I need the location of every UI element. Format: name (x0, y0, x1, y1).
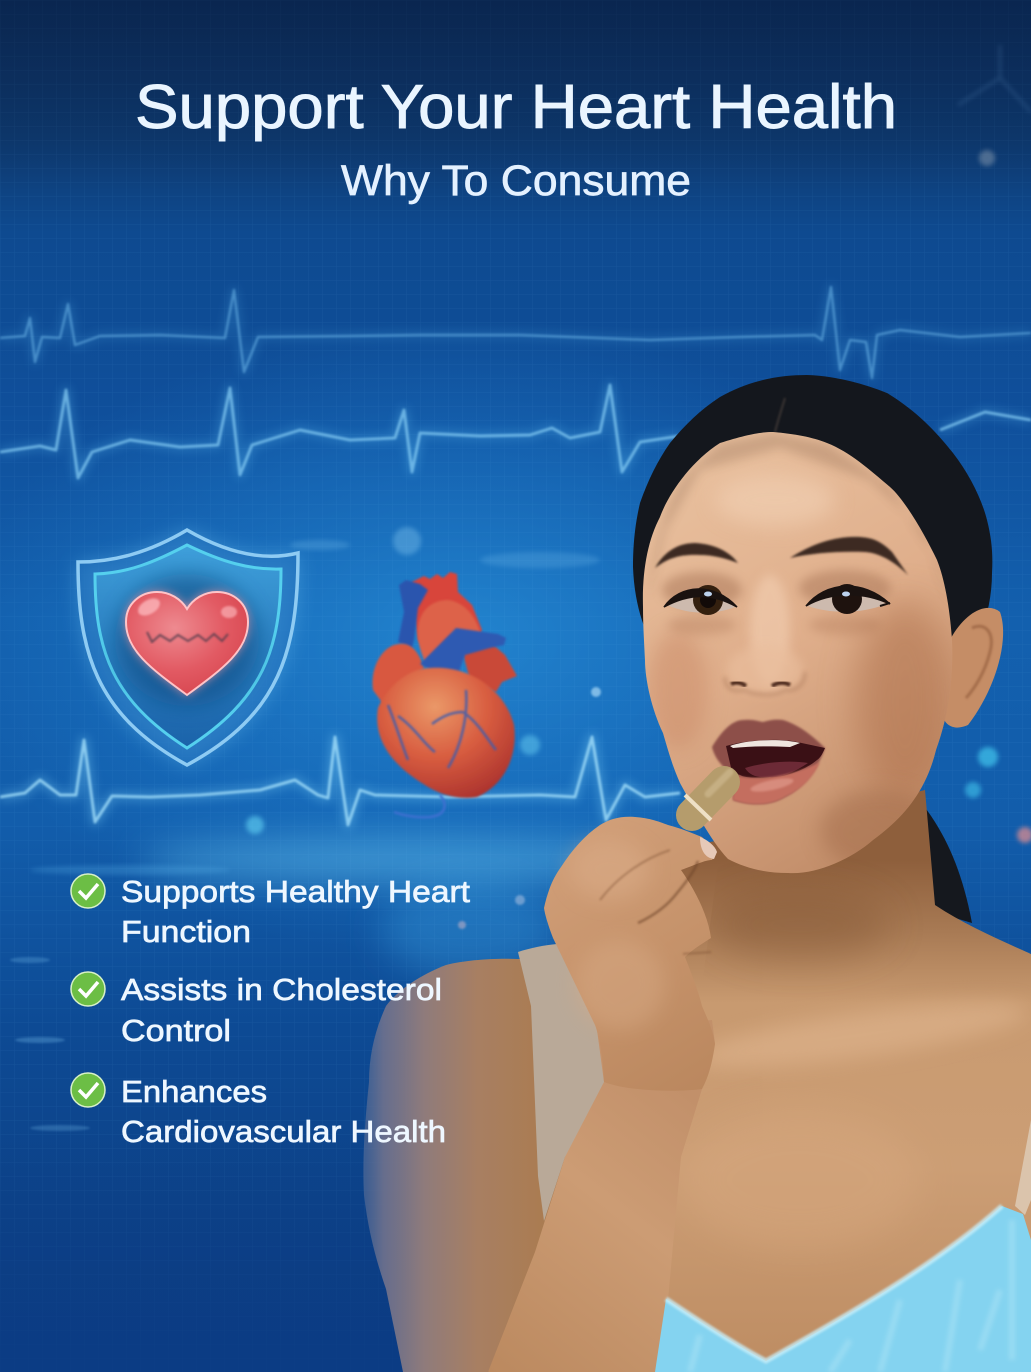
nose (725, 646, 805, 695)
benefit 3: Cardiovascular Health (121, 1114, 446, 1149)
capsule (685, 772, 730, 820)
ear (940, 608, 1003, 728)
ventricles (377, 668, 515, 798)
face shading (648, 432, 955, 870)
left atrium (462, 642, 517, 692)
ecg line 3 (0, 737, 680, 825)
dress (655, 1206, 1031, 1372)
ecg line 2 (0, 385, 1031, 478)
bra strap (518, 944, 620, 1221)
right atrium (372, 644, 424, 705)
ponytail (915, 795, 972, 923)
hair (633, 375, 992, 650)
woman taking capsule (363, 375, 1031, 1372)
ecg line 1 (0, 287, 1031, 378)
benefit 3: Enhances (121, 1074, 267, 1109)
forearm (488, 1020, 715, 1372)
benefits list (71, 874, 470, 1149)
vena cava (398, 580, 428, 648)
eye right (799, 570, 891, 635)
benefit 2 (71, 972, 442, 1048)
eyebrow left (655, 543, 738, 568)
icon: shield with heart (78, 530, 298, 765)
benefit 2: Control (121, 1013, 231, 1048)
title: Support Your Heart Health (135, 73, 897, 142)
heart (126, 592, 248, 695)
aorta and crown (412, 572, 482, 660)
hand (544, 817, 717, 1091)
benefit 1 (71, 874, 470, 949)
benefit 1: Function (121, 914, 251, 949)
eye left (662, 572, 742, 635)
benefit 3 (71, 1073, 446, 1149)
pulmonary artery (420, 628, 506, 680)
collarbone highlights (712, 899, 1018, 1068)
left arm and shoulder (363, 959, 575, 1372)
icon: anatomical heart (372, 572, 517, 817)
knuckle highlights and finger lines (570, 837, 717, 1030)
neck and chest (545, 790, 1031, 1372)
subtitle: Why To Consume (341, 157, 691, 205)
eyebrow right (790, 537, 908, 575)
benefit 1: Supports Healthy Heart (121, 874, 470, 909)
face (643, 432, 952, 873)
benefit 2: Assists in Cholesterol (121, 972, 442, 1007)
right strap (1015, 1120, 1031, 1215)
mouth (712, 720, 825, 804)
